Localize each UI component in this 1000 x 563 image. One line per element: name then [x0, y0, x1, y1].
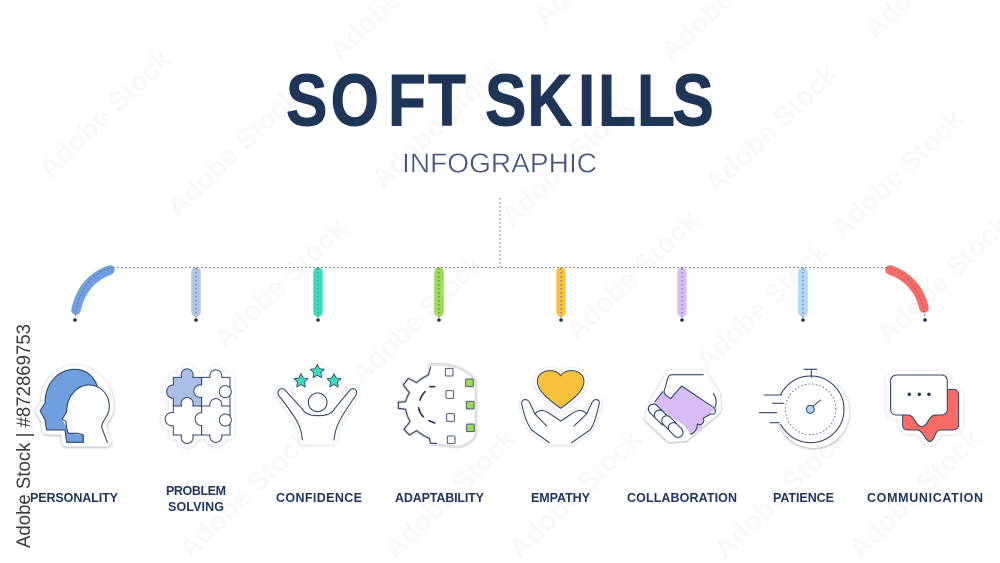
text: Adobe Stock: [825, 103, 970, 244]
label: adaptability: ADAPTABILITY: [395, 491, 485, 505]
heart: [537, 371, 584, 408]
subtitle: INFOGRAPHIC: [402, 148, 597, 178]
text: Adobe Stock: [33, 43, 178, 184]
white bubble: [891, 375, 947, 427]
connector tree: [73, 198, 927, 322]
label: communication: COMMUNICATION: [867, 491, 983, 505]
text: Adobe Stock: [708, 423, 853, 563]
stars: [294, 364, 341, 387]
icon: handshake: [646, 374, 717, 439]
label: problem solving: PROBLEM: [166, 484, 226, 498]
label: problem solving: SOLVING: [168, 500, 224, 514]
colored branch bands: [76, 270, 924, 312]
label: personality: PERSONALITY: [30, 491, 119, 505]
label: patience: PATIENCE: [773, 491, 834, 505]
text: Adobe Stock: [495, 91, 640, 232]
top right piece: [194, 370, 230, 406]
text: Adobe Stock: [345, 248, 490, 389]
icon: confidence person with stars: [278, 364, 357, 442]
label: problem solving: [166, 484, 226, 514]
blue piece: [167, 369, 202, 406]
red bubble: [903, 389, 959, 442]
text: Adobe Stock: [173, 423, 318, 563]
icon: empathy heart in hands: [522, 371, 599, 443]
purple hand: [653, 386, 715, 435]
text: Adobe Stock: [560, 205, 705, 346]
title: SOFT SKILLS: [286, 61, 714, 142]
dotted lines: [75, 198, 925, 318]
icon: stopwatch: [759, 369, 849, 448]
text: Adobe Stock: [378, 423, 523, 563]
dashed arc: [419, 387, 435, 423]
fingers: [646, 402, 685, 439]
text: Adobe Stock: [208, 213, 353, 354]
icon: personality heads: [40, 369, 109, 442]
icon: adaptability gear: [398, 364, 476, 447]
text: Adobe Stock: [161, 81, 306, 222]
label: collaboration: COLLABORATION: [627, 491, 737, 505]
label: confidence: CONFIDENCE: [276, 491, 362, 505]
icon: chat bubbles: [891, 375, 959, 442]
label: empathy: EMPATHY: [531, 491, 591, 505]
lower left piece: [165, 398, 202, 443]
check squares: [445, 368, 474, 444]
lower right piece: [195, 399, 230, 442]
text: Adobe Stock: [690, 235, 835, 376]
text: Adobe Stock: [699, 58, 844, 199]
stock credit: Adobe Stock | #872869753: [14, 324, 35, 548]
text: Adobe Stock: [366, 53, 511, 194]
text: Adobe Stock: [503, 423, 648, 563]
end dots: [73, 318, 927, 322]
text: Adobe Stock: [843, 423, 988, 563]
icon: puzzle: [165, 369, 231, 443]
